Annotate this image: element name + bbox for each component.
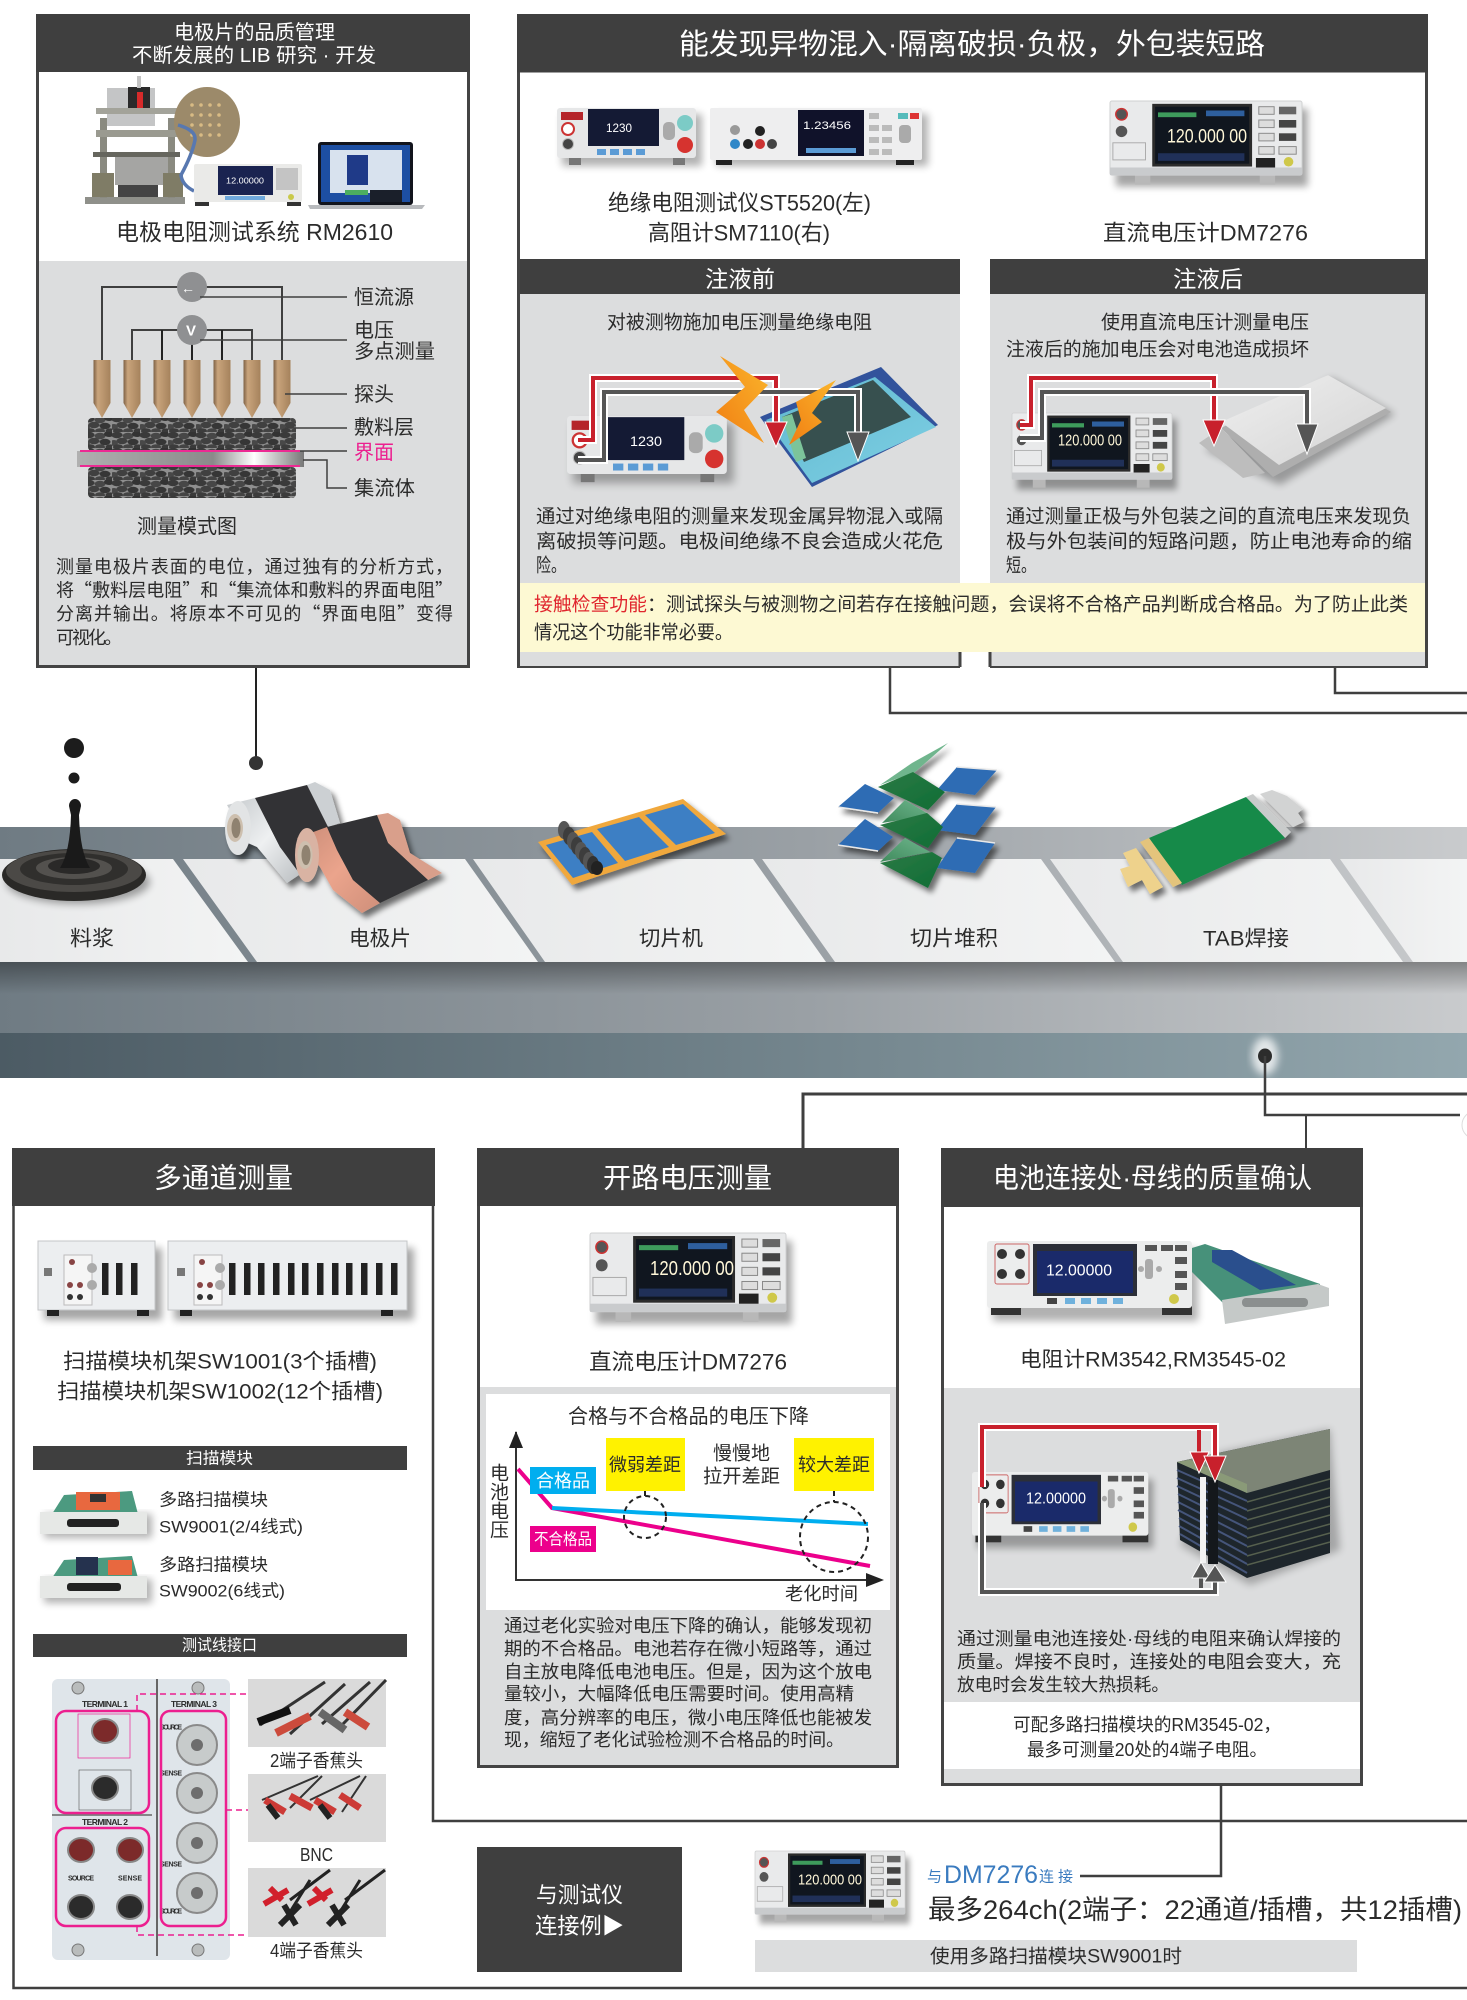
image: SW1001 rack xyxy=(38,1241,162,1320)
image: SW9002 module xyxy=(40,1556,152,1603)
diagram: busbar measurement xyxy=(972,1427,1340,1592)
text: electrode description: 将“敷料层电阻”和“集流体和敷料的界面电阻” xyxy=(56,576,453,602)
text: SW9001: SW9001(2/4线式) xyxy=(159,1518,303,1536)
image: SM7110 high resistance meter: 1.23456 xyxy=(803,120,851,132)
chart: voltage drop: 较大差距 xyxy=(798,1455,870,1475)
text: busbar description: 质量。焊接不良时，连接处的电阻会变大，充 xyxy=(957,1652,1341,1672)
caption: insulation testers: 绝缘电阻测试仪ST5520(左) xyxy=(608,190,871,216)
text: voltage drop description xyxy=(504,1616,872,1750)
button: connection example: 与测试仪 xyxy=(536,1882,623,1908)
text: busbar description: 放电时会发生较大热损耗。 xyxy=(957,1675,1169,1695)
button: connection example xyxy=(477,1847,682,1972)
label: stacking: 切片堆积 xyxy=(910,928,998,950)
text: connection with DM7276: DM7276 xyxy=(944,1861,1038,1889)
text: after injection description: 极与外包装间的短路问题，防止电池寿命的缩 xyxy=(1006,530,1412,552)
chart: voltage drop: 慢慢地 xyxy=(713,1442,770,1464)
chart: voltage drop: 不合格品 xyxy=(534,1530,592,1548)
text: voltage drop description: 期的不合格品。电池若存在微小短路等，通过 xyxy=(504,1639,872,1659)
panel: foreign matter detection xyxy=(517,14,1428,668)
chart: voltage drop: 合格与不合格品的电压下降 xyxy=(568,1405,809,1428)
chart: voltage drop: 池 xyxy=(490,1482,509,1504)
sub-heading: before injection: 注液前 xyxy=(705,266,775,292)
image: 4-terminal banana leads xyxy=(248,1868,386,1937)
text: before injection lead: 对被测物施加电压测量绝缘电阻 xyxy=(607,312,872,334)
image: RM3542 meter xyxy=(987,1241,1198,1321)
text: connection with DM7276: 与 xyxy=(927,1868,942,1886)
text: after injection lead: 注液后的施加电压会对电池造成损坏 xyxy=(1006,338,1309,360)
connector: busbar panel to connection example xyxy=(1080,1785,1221,1876)
text: connection with DM7276 xyxy=(927,1861,1073,1889)
panel heading xyxy=(941,1148,1363,1207)
image: terminal panel: TERMINAL 2 xyxy=(82,1817,128,1827)
image: BNC leads xyxy=(248,1774,386,1842)
image: DM7276: 120.000 00 xyxy=(650,1258,734,1280)
image: terminal panel: TERMINAL 3 xyxy=(171,1699,217,1709)
chart: voltage drop: 合格品 xyxy=(536,1471,590,1491)
text: after injection description: 短。 xyxy=(1006,554,1036,576)
diagram: measurement mode: 恒流源 xyxy=(354,286,414,309)
icon: slitter sheet xyxy=(538,799,726,885)
diagram: measurement mode: V xyxy=(186,322,196,340)
text: before injection description: 离破损等问题。电极间绝缘不良会造成火花危 xyxy=(536,530,943,552)
sub-heading: before injection xyxy=(520,259,960,294)
caption: DM7276: 直流电压计DM7276 xyxy=(589,1350,787,1374)
image: DM7276 meter: 120.000 00 xyxy=(1167,126,1247,148)
panel heading xyxy=(477,1148,899,1206)
image: terminal panel: SOURCE xyxy=(160,1908,182,1916)
text: RM3545 note xyxy=(1013,1715,1281,1760)
connector: electrode panel to belt xyxy=(249,667,263,770)
chart: voltage drop: 微弱差距 xyxy=(609,1455,681,1475)
caption: RM3542: 电阻计RM3542,RM3545-02 xyxy=(1020,1348,1286,1372)
note: scan module condition xyxy=(755,1940,1357,1972)
panel heading: 不断发展的 LIB 研究 · 开发 xyxy=(132,44,376,67)
text: busbar description xyxy=(957,1629,1341,1695)
text: SW9002: SW9002(6线式) xyxy=(159,1582,285,1600)
panel: open-circuit voltage xyxy=(477,1148,899,1766)
caption: RM2610: 电极电阻测试系统 RM2610 xyxy=(116,219,393,245)
text: before injection description xyxy=(536,506,943,576)
panel heading xyxy=(12,1148,435,1206)
image: terminal panel: SENSE xyxy=(118,1876,142,1882)
text: after injection lead xyxy=(1006,312,1309,360)
sub-heading: scan module xyxy=(33,1446,407,1470)
text: voltage drop description: 现，缩短了老化试验检测不合格品的时间。 xyxy=(504,1730,844,1750)
chart: voltage drop: 电 xyxy=(490,1462,509,1484)
text: SW9001: 多路扫描模块 xyxy=(159,1490,268,1510)
diagram: measurement mode: 电压 xyxy=(354,319,394,342)
icon: stacking xyxy=(838,743,997,888)
text: after injection description: 通过测量正极与外包装之间的直流电压来发现负 xyxy=(1006,506,1411,528)
text: voltage drop description: 自主放电降低电池电压。但是，因为这个放电 xyxy=(504,1662,872,1682)
image: terminal panel xyxy=(52,1679,262,1960)
image: SM7110 high resistance meter xyxy=(710,108,928,166)
diagram: measurement mode: 探头 xyxy=(354,383,394,406)
image: RM2610 system: 12.00000 xyxy=(226,176,265,186)
label: slurry: 料浆 xyxy=(70,928,114,950)
panel: busbar quality xyxy=(941,1148,1363,1784)
image: SW1002 rack xyxy=(168,1241,414,1320)
caption: measurement diagram: 测量模式图 xyxy=(137,515,237,538)
diagram: DC voltage measurement xyxy=(1012,375,1395,490)
panel heading: 能发现异物混入·隔离破损·负极，外包装短路 xyxy=(679,28,1265,61)
chart: voltage drop: 老化时间 xyxy=(785,1584,858,1604)
diagram: measurement mode: ← xyxy=(181,280,195,296)
note: scan module condition: 使用多路扫描模块SW9001时 xyxy=(930,1946,1182,1968)
connector: upper panel lines xyxy=(890,667,1467,713)
process tiles xyxy=(0,859,1467,962)
text: SW9002: 多路扫描模块 xyxy=(159,1556,268,1574)
image: DM7276 meter xyxy=(1110,101,1308,186)
text: SW9002 xyxy=(159,1556,285,1600)
image: terminal panel: SENSE xyxy=(160,1862,182,1868)
text: after injection description xyxy=(1006,506,1412,576)
caption: racks: 扫描模块机架SW1001(3个插槽) xyxy=(63,1350,377,1374)
chart: voltage drop: 拉开差距 xyxy=(703,1466,780,1488)
text: voltage drop description: 量较小，大幅降低电压需要时间。使用高精 xyxy=(504,1684,854,1704)
panel heading: 电池连接处·母线的质量确认 xyxy=(993,1162,1312,1194)
image: 2-terminal banana leads xyxy=(248,1679,386,1747)
caption: DM7276: 直流电压计DM7276 xyxy=(1103,220,1308,246)
sub-heading: after injection: 注液后 xyxy=(1173,266,1243,292)
image: ST5520 insulation tester: 1230 xyxy=(606,121,632,135)
image: SW9001 module xyxy=(40,1491,152,1538)
text: before injection description: 险。 xyxy=(536,554,566,576)
image: terminal panel: SOURCE xyxy=(160,1724,182,1732)
panel: electrode quality xyxy=(36,14,470,666)
label: electrode sheet: 电极片 xyxy=(349,928,411,950)
panel heading: 多通道测量 xyxy=(154,1162,293,1194)
callout: contact check: ：测试探头与被测物之间若存在接触问题，会误将不合格产品判断成合格品。为了防止此类 xyxy=(647,594,1408,616)
icon: electrode rolls xyxy=(225,782,442,913)
callout: contact check xyxy=(520,583,1425,652)
image: RM2610 system xyxy=(85,76,425,209)
diagram: DC voltage measurement: 120.000 00 xyxy=(1058,432,1122,450)
text: electrode description: 分离并输出。将原本不可见的“界面电阻”变得 xyxy=(56,600,453,626)
image: terminal panel: TERMINAL 1 xyxy=(82,1699,128,1709)
panel heading: 开路电压测量 xyxy=(603,1162,772,1194)
diagram: measurement mode: 敷料层 xyxy=(354,416,414,439)
image: ST5520 insulation tester xyxy=(557,108,702,166)
text: before injection description: 通过对绝缘电阻的测量来发现金属异物混入或隔 xyxy=(536,506,943,528)
image: RM3542 meter: 12.00000 xyxy=(1046,1262,1112,1280)
diagram: measurement mode xyxy=(77,272,435,500)
diagram: measurement mode: 集流体 xyxy=(354,477,415,500)
chart: voltage drop: 压 xyxy=(490,1520,509,1542)
text: max channels: 最多264ch(2端子：22通道/插槽，共12插槽) xyxy=(928,1895,1462,1925)
sub-heading: test lead interface xyxy=(33,1634,407,1657)
caption: 2-terminal banana: 2端子香蕉头 xyxy=(270,1751,363,1771)
panel: multi-channel measurement xyxy=(12,1148,1467,1988)
diagram: measurement mode: 多点测量 xyxy=(354,340,435,363)
text: after injection lead: 使用直流电压计测量电压 xyxy=(1101,312,1309,334)
image: terminal panel: SENSE xyxy=(160,1770,182,1778)
text: busbar description: 通过测量电池连接处·母线的电阻来确认焊接的 xyxy=(957,1629,1341,1649)
button: connection example: 连接例▶ xyxy=(535,1914,624,1938)
panel heading xyxy=(36,14,470,72)
panel heading: 电极片的品质管理 xyxy=(174,21,335,44)
image: DM7276 xyxy=(590,1233,792,1324)
text: SW9001 xyxy=(159,1490,303,1536)
panel heading xyxy=(517,14,1428,72)
connector: belt marker to lower panels xyxy=(803,1037,1467,1150)
sub-heading: scan module: 扫描模块 xyxy=(186,1450,253,1468)
text: connection with DM7276: 连接 xyxy=(1039,1868,1073,1886)
sub-heading: test lead interface: 测试线接口 xyxy=(182,1636,257,1654)
caption: BNC: BNC xyxy=(300,1845,333,1865)
text: voltage drop description: 度，高分辨率的电压，微小电压降低也能被发 xyxy=(504,1708,872,1728)
caption: racks: 扫描模块机架SW1002(12个插槽) xyxy=(57,1380,383,1404)
chart: voltage drop xyxy=(486,1394,890,1610)
process belt band xyxy=(0,827,1467,1078)
image: DM7276 small: 120.000 00 xyxy=(798,1872,862,1888)
caption: insulation testers: 高阻计SM7110(右) xyxy=(648,220,830,246)
text: electrode description: 测量电极片表面的电位，通过独有的分析方式， xyxy=(56,553,453,579)
text: electrode description: 可视化。 xyxy=(56,624,122,650)
label: slitter: 切片机 xyxy=(639,928,703,950)
diagram: insulation measurement: 1230 xyxy=(630,433,662,449)
caption: racks xyxy=(57,1350,383,1404)
diagram: measurement mode: 界面 xyxy=(354,442,394,464)
callout: contact check: 情况这个功能非常必要。 xyxy=(534,622,733,644)
icon: TAB welded cell xyxy=(1120,790,1304,894)
text: voltage drop description: 通过老化实验对电压下降的确认，能够发现初 xyxy=(504,1616,872,1636)
text: RM3545 note: 最多可测量20处的4端子电阻。 xyxy=(1027,1740,1267,1760)
caption: insulation testers xyxy=(608,190,871,246)
image: terminal panel: SOURCE xyxy=(68,1876,94,1882)
callout: contact check: 接触检查功能 xyxy=(534,594,647,616)
sub-heading: after injection xyxy=(990,259,1428,294)
label: TAB welding: TAB焊接 xyxy=(1203,928,1289,950)
image: scan module card xyxy=(1192,1244,1329,1324)
diagram: insulation measurement xyxy=(567,356,938,487)
text: RM3545 note: 可配多路扫描模块的RM3545-02， xyxy=(1013,1715,1281,1735)
caption: 4-terminal banana: 4端子香蕉头 xyxy=(270,1941,363,1961)
diagram: busbar measurement: 12.00000 xyxy=(1026,1490,1086,1508)
icon: slurry xyxy=(2,738,150,904)
image: DM7276 small xyxy=(755,1851,910,1924)
text: electrode description xyxy=(56,553,453,650)
chart: voltage drop: 电 xyxy=(490,1500,509,1522)
